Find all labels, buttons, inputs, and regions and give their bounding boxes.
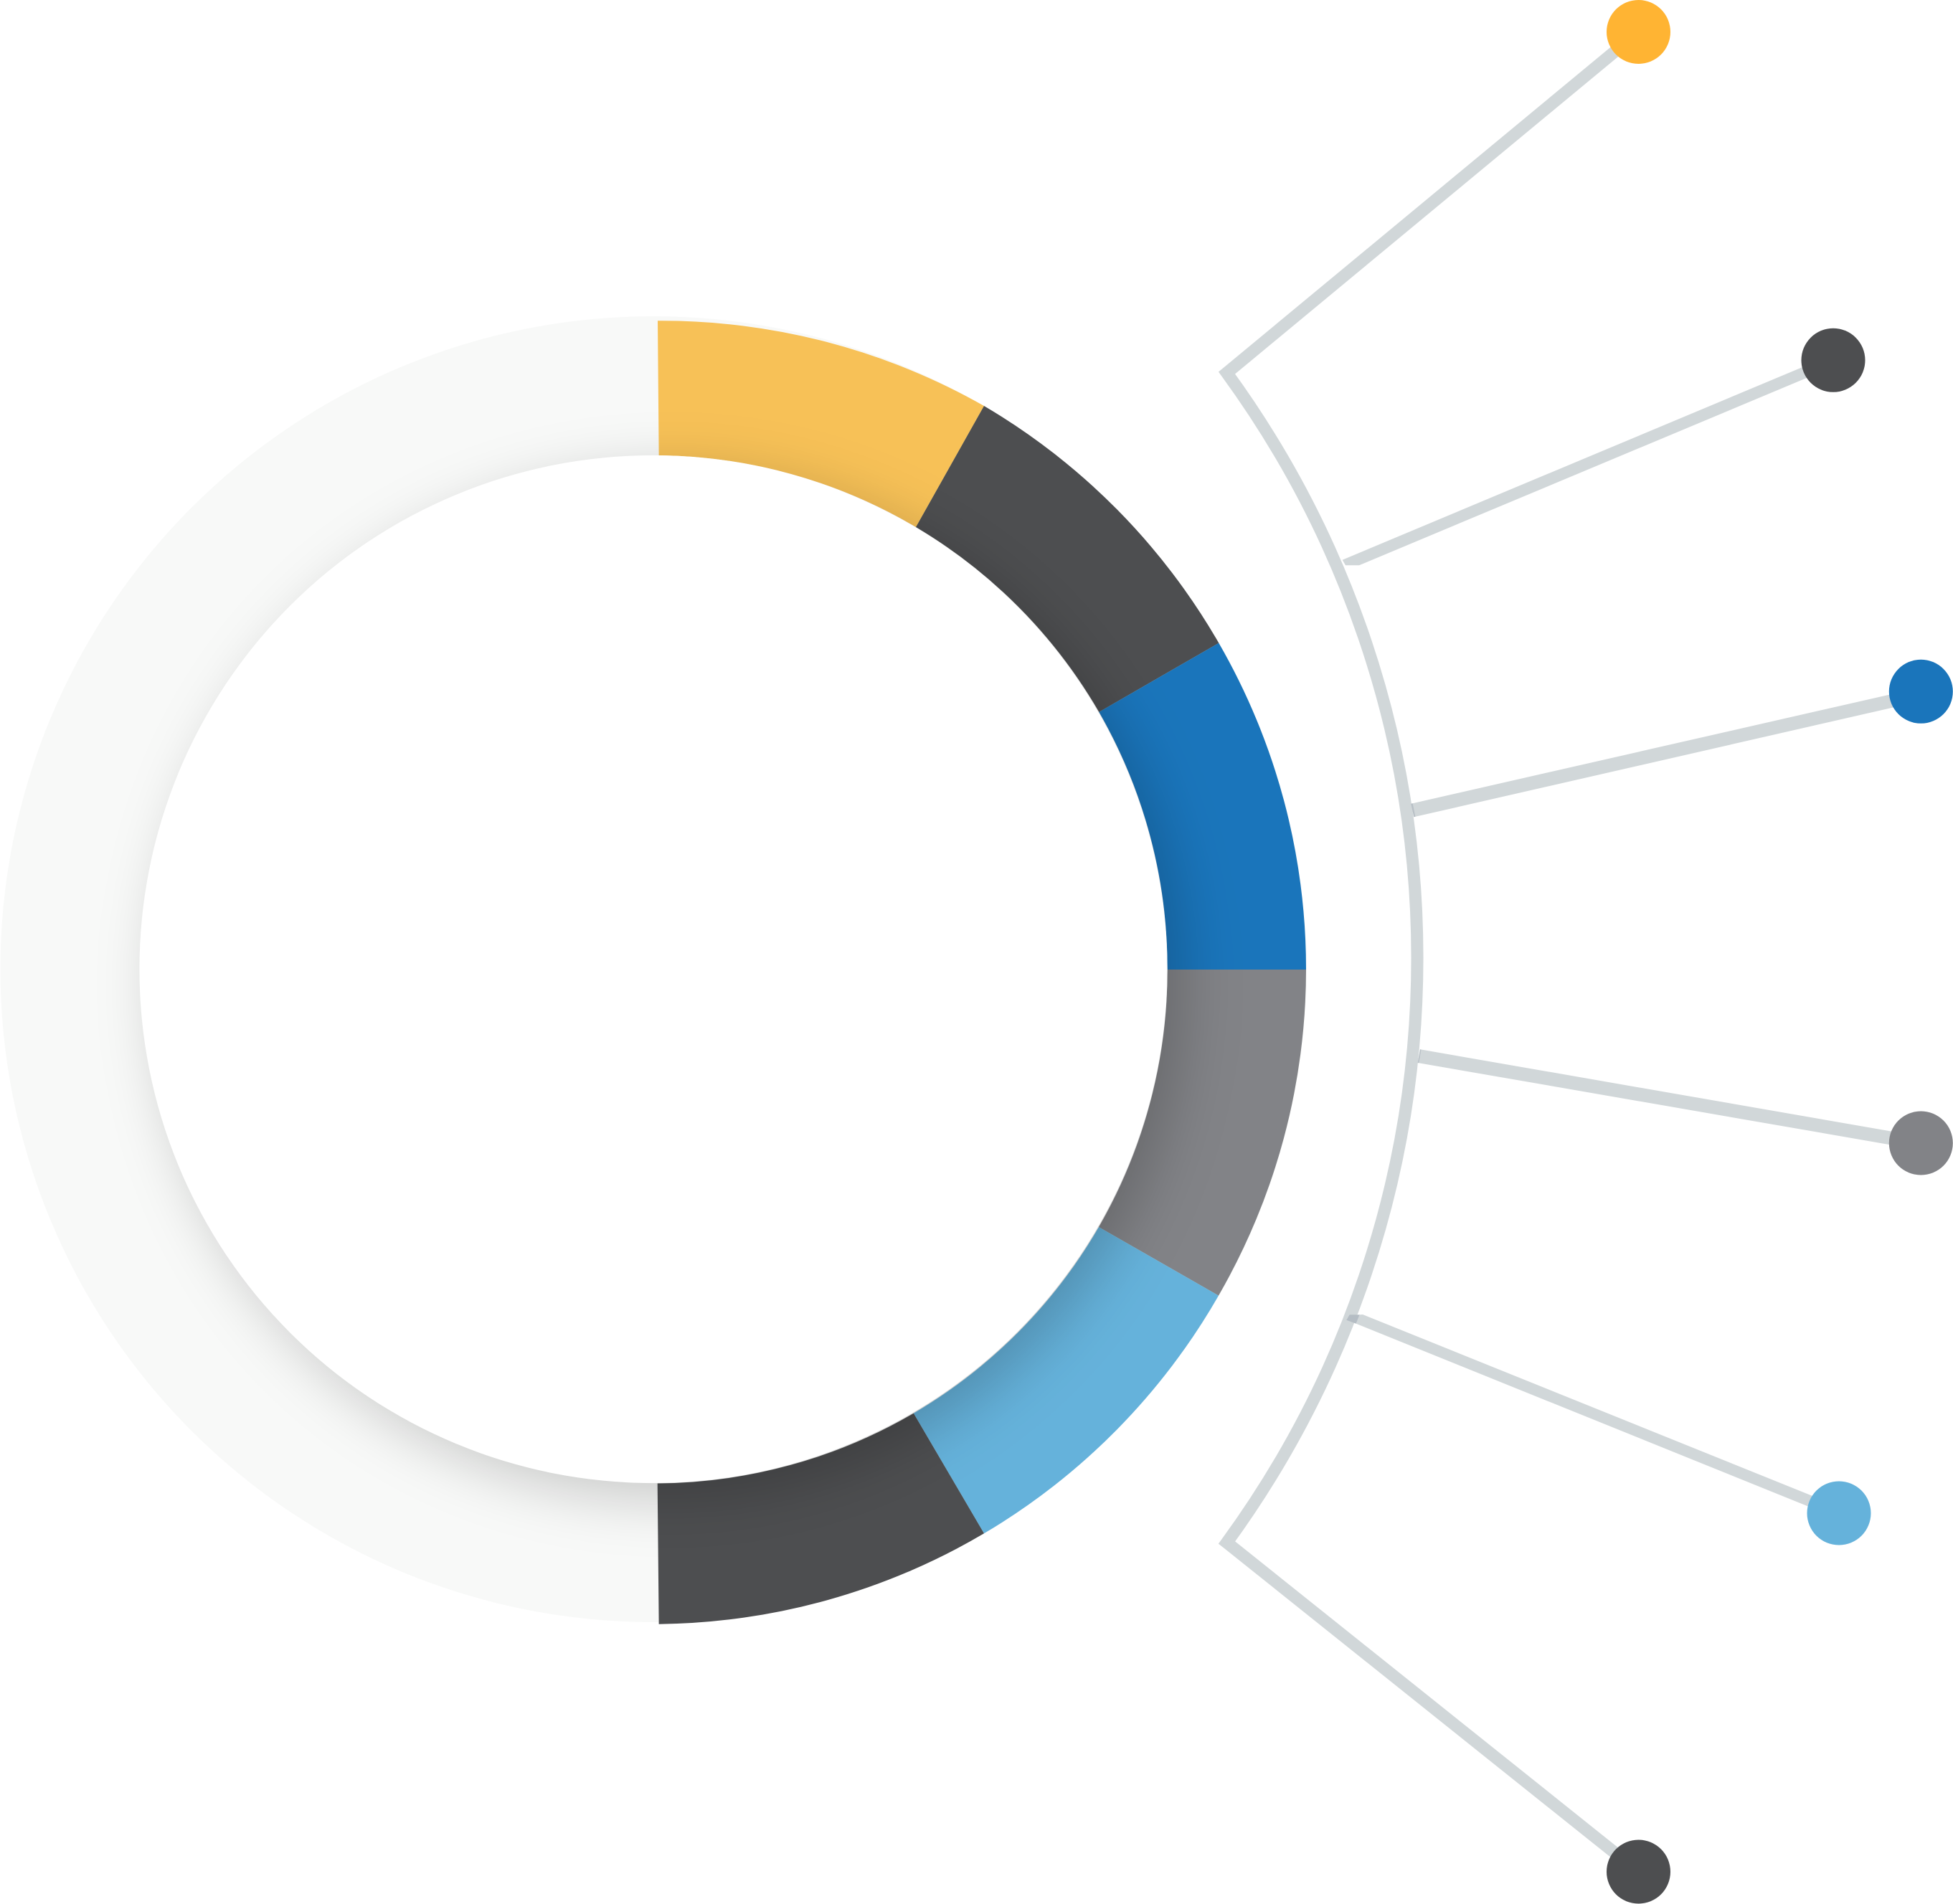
ring centre: [139, 455, 1168, 1483]
segment: blue: [1099, 643, 1306, 970]
panel: connector lines: [1226, 32, 1921, 1872]
connector: blue: [1411, 688, 1921, 817]
connector: dark grey upper: [1343, 354, 1833, 565]
connector overlap: blue: [1411, 803, 1415, 817]
panel: ring chart: [0, 316, 1307, 1624]
dot: mid grey: [1889, 1112, 1953, 1175]
connector overlap: mid grey: [1418, 1049, 1422, 1063]
bracket arc with top and bottom connectors: [1226, 32, 1638, 1872]
segment: yellow: [658, 321, 984, 527]
connector overlap: light blue: [1346, 1315, 1360, 1324]
dot: dark grey upper: [1802, 328, 1865, 392]
segment: light blue: [914, 1227, 1219, 1533]
segment: dark grey lower: [658, 1413, 984, 1624]
ring background track: [0, 316, 1307, 1622]
dot: light blue: [1807, 1482, 1871, 1545]
panel: end dots: [1607, 0, 1953, 1903]
connector: light blue: [1356, 1315, 1839, 1519]
connector: mid grey: [1418, 1049, 1921, 1150]
dot: yellow: [1607, 0, 1670, 64]
dot: dark grey lower: [1607, 1840, 1670, 1903]
inner shadow on ring: [156, 471, 1183, 1498]
segment: dark grey upper: [916, 406, 1219, 712]
segment: mid grey: [1099, 970, 1306, 1296]
dot: blue: [1889, 660, 1953, 724]
